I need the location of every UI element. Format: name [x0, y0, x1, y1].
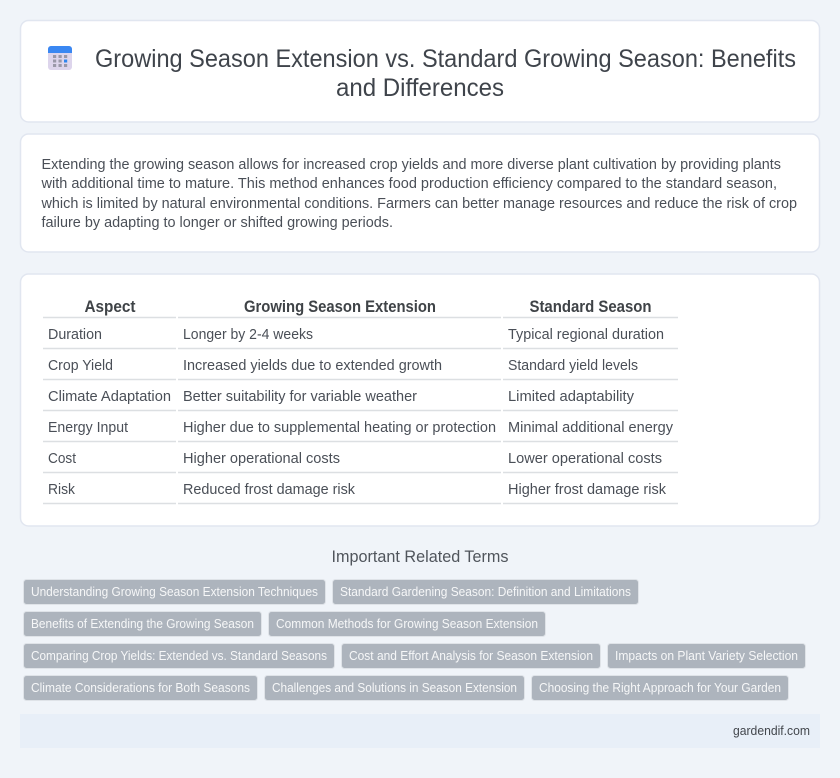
- tag: Common Methods for Growing Season Extension: [276, 617, 538, 631]
- table row: cost: Cost: [48, 451, 76, 467]
- title: [95, 46, 796, 102]
- text block: intro: [41, 157, 797, 231]
- title: Growing Season Extension vs. Standard Growing Season: Benefits: [95, 46, 796, 73]
- table row: duration: Duration: [48, 327, 102, 343]
- tag: [24, 676, 258, 700]
- tag: [268, 612, 546, 636]
- table header: [84, 298, 652, 316]
- panel: comparison table: [20, 274, 820, 526]
- table row: energy input: [48, 420, 674, 436]
- tag: [264, 676, 524, 700]
- related term tags: [24, 580, 806, 700]
- table row: climate adaptation: Limited adaptability: [508, 389, 635, 405]
- footer: [20, 714, 820, 748]
- tag: Standard Gardening Season: Definition and Limitations: [340, 585, 631, 599]
- text block: intro: failure by adapting to longer or shifted growing periods.: [42, 215, 393, 231]
- table row: energy input: Higher due to supplemental heating or protection: [183, 420, 496, 436]
- panel: title card: [20, 20, 820, 122]
- tag: Choosing the Right Approach for Your Garden: [539, 681, 781, 695]
- table row: energy input: Minimal additional energy: [508, 420, 674, 436]
- icon: calendar: [48, 46, 72, 70]
- table row: risk: Higher frost damage risk: [508, 482, 667, 498]
- table row: crop yield: Increased yields due to extended growth: [183, 358, 442, 374]
- table row: risk: [48, 482, 667, 498]
- table row: climate adaptation: Climate Adaptation: [48, 389, 171, 405]
- table header: Standard Season: [530, 298, 652, 316]
- table row: crop yield: Crop Yield: [48, 358, 113, 374]
- table rules: [43, 318, 678, 504]
- tag: [24, 612, 262, 636]
- table row: crop yield: Standard yield levels: [508, 358, 638, 374]
- tag: [332, 580, 638, 604]
- table header: Aspect: [84, 298, 136, 316]
- table row: climate adaptation: [48, 389, 635, 405]
- tag: Impacts on Plant Variety Selection: [615, 649, 798, 663]
- table row: duration: Longer by 2-4 weeks: [183, 327, 313, 343]
- tag: [24, 644, 334, 668]
- table row: crop yield: [48, 358, 638, 374]
- tag: Climate Considerations for Both Seasons: [31, 681, 250, 695]
- tag: [24, 580, 326, 604]
- tag: Challenges and Solutions in Season Extension: [272, 681, 517, 695]
- tag: [608, 644, 806, 668]
- table row: risk: Reduced frost damage risk: [183, 482, 356, 498]
- heading: important related terms: Important Related Terms: [332, 548, 508, 566]
- tag: Benefits of Extending the Growing Season: [31, 617, 254, 631]
- table row: duration: Typical regional duration: [508, 327, 664, 343]
- table header: Growing Season Extension: [244, 298, 436, 316]
- panel: intro paragraph: [20, 134, 820, 252]
- table row: cost: Higher operational costs: [183, 451, 340, 467]
- tag: Understanding Growing Season Extension Techniques: [31, 585, 318, 599]
- tag: [532, 676, 788, 700]
- tag: [342, 644, 600, 668]
- footer source: gardendif.com: [733, 724, 810, 738]
- tag: Comparing Crop Yields: Extended vs. Standard Seasons: [31, 649, 327, 663]
- text block: intro: Extending the growing season allows for increased crop yields and more diverse plant cultivation by providing plants: [42, 157, 781, 173]
- table row: duration: [48, 327, 664, 343]
- table row: climate adaptation: Better suitability for variable weather: [183, 389, 417, 405]
- table row: energy input: Energy Input: [48, 420, 128, 436]
- text block: intro: which is limited by natural environmental conditions. Farmers can better manage resources and reduce the risk of crop: [41, 196, 797, 212]
- text block: intro: with additional time to mature. This method enhances food production efficiency compared to the standard season,: [41, 176, 777, 192]
- tag: Cost and Effort Analysis for Season Extension: [349, 649, 593, 663]
- table row: cost: [48, 451, 662, 467]
- table row: cost: Lower operational costs: [508, 451, 662, 467]
- title: and Differences: [336, 75, 504, 102]
- table row: risk: Risk: [48, 482, 76, 498]
